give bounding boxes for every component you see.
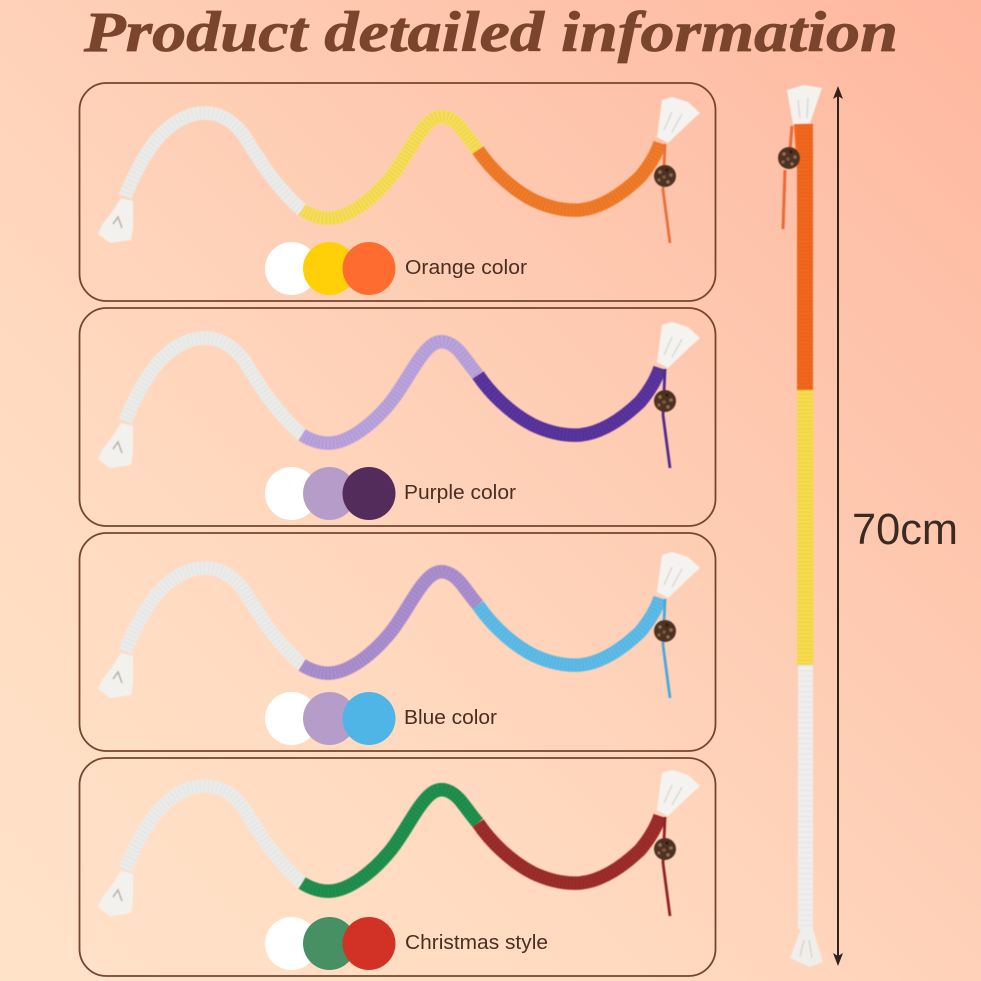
panel: orange color xyxy=(80,83,716,301)
straight rope: full length xyxy=(778,85,823,967)
rope: blue xyxy=(98,552,700,698)
panel: purple color xyxy=(80,308,716,526)
title: Product detailed information xyxy=(83,1,898,64)
label: christmas style: Christmas style xyxy=(405,932,548,954)
swatches: blue xyxy=(265,692,396,745)
arrow: length dimension xyxy=(833,86,843,966)
swatches: purple xyxy=(265,467,396,520)
label: 70cm: 70cm xyxy=(852,505,958,554)
panel: christmas style xyxy=(80,758,716,976)
rope: christmas xyxy=(98,770,700,916)
panel: blue color xyxy=(80,533,716,751)
label: purple color: Purple color xyxy=(404,482,516,504)
label: orange color: Orange color xyxy=(405,257,527,279)
label: blue color: Blue color xyxy=(404,707,497,729)
swatches: christmas xyxy=(265,917,396,970)
rope: purple xyxy=(98,322,700,468)
swatches: orange xyxy=(265,242,396,295)
rope: orange xyxy=(98,97,700,243)
